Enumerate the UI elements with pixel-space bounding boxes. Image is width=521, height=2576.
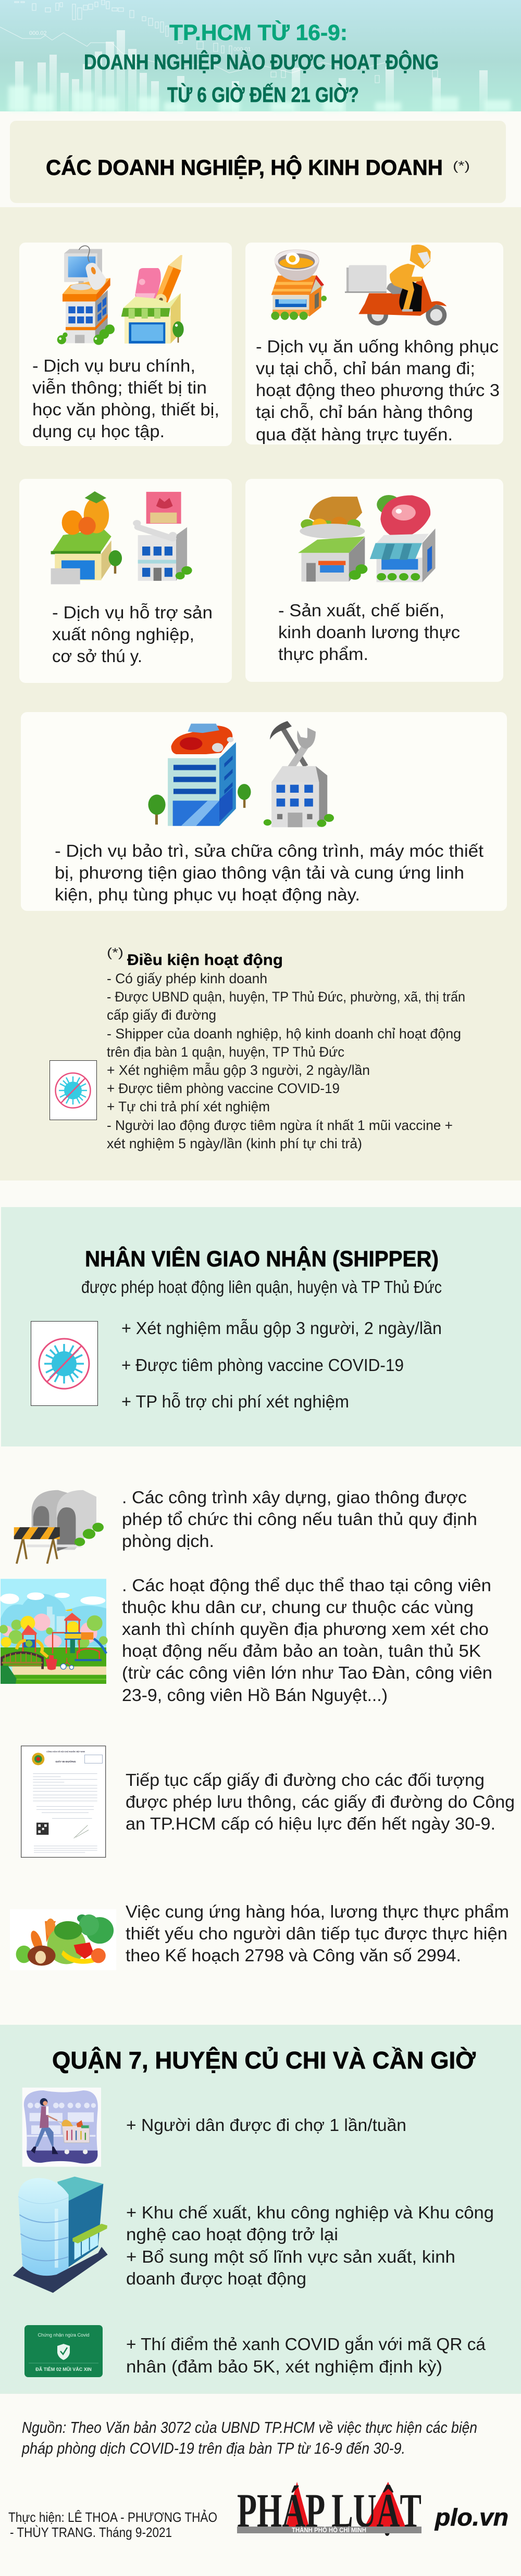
heading: district 7: QUẬN 7, HUYỆN CỦ CHI VÀ CẦN GIỜ xyxy=(52,2047,476,2074)
icon: travel permit document: GIẤY ĐI ĐƯỜNG xyxy=(55,1759,76,1763)
text: shipper conditions: + Xét nghiệm mẫu gộp 3 người, 2 ngày/lần xyxy=(121,1318,442,1338)
conditions of operation: cấp giấy đi đường xyxy=(107,1007,216,1023)
text: industrial zones: + Bổ sung một số lĩnh vực sản xuất, kinh xyxy=(126,2247,455,2266)
text: industrial zones: doanh được hoạt động xyxy=(126,2269,306,2288)
icon: no virus large xyxy=(31,1321,98,1405)
conditions of operation: - Shipper của doanh nghiệp, hộ kinh doanh chỉ hoạt động xyxy=(107,1026,461,1042)
card: food production xyxy=(245,479,503,682)
text: construction xyxy=(122,1488,477,1551)
text: maintenance and repair: kiện, phụ tùng phục vụ hoạt động này. xyxy=(55,885,360,904)
logo: plo.vn: plo.vn xyxy=(434,2504,508,2531)
text: sports in parks: 23-9, công viên Hồ Bán Nguyệt...) xyxy=(122,1685,388,1705)
text: shipper conditions: + TP hỗ trợ chi phí xét nghiệm xyxy=(121,1392,349,1411)
source note: pháp phòng dịch COVID-19 trên địa bàn TP từ 16-9 đến 30-9. xyxy=(21,2439,405,2457)
card: maintenance and repair xyxy=(21,712,507,911)
text: post and telecom services: - Dịch vụ bưu chính, xyxy=(32,356,195,375)
text: agriculture and veterinary: xuất nông nghiệp, xyxy=(52,625,194,644)
text: takeaway food service: - Dịch vụ ăn uống không phục xyxy=(256,337,499,356)
text: takeaway food service: vụ tại chỗ, chỉ bán mang đi; xyxy=(256,359,475,378)
conditions of operation: - Người lao động được tiêm ngừa ít nhất 1 mũi vaccine + xyxy=(107,1118,453,1133)
conditions of operation: trên địa bàn 1 quận, huyện, TP Thủ Đức xyxy=(107,1044,344,1060)
source note xyxy=(21,2418,477,2457)
text: sports in parks: (trừ các công viên lớn như Tao Đàn, công viên xyxy=(122,1663,492,1682)
text: post and telecom services: học văn phòng, thiết bị, xyxy=(32,400,219,419)
text: takeaway food service: hoạt động theo phương thức 3 xyxy=(256,380,500,400)
text: industrial zones xyxy=(126,2203,494,2288)
conditions of operation: + Được tiêm phòng vaccine COVID-19 xyxy=(107,1081,340,1096)
header banner: 000.02 xyxy=(29,30,47,36)
icon: woman shopping xyxy=(22,2088,101,2167)
icon: meat shop xyxy=(370,495,436,582)
text: maintenance and repair: bị, phương tiện giao thông vận tải và cung ứng linh xyxy=(55,863,464,882)
icon: computer building xyxy=(57,246,115,345)
panel: district 7, Cu Chi and Can Gio xyxy=(0,2025,521,2394)
text: industrial zones: + Khu chế xuất, khu công nghiệp và Khu công xyxy=(126,2203,494,2222)
icon: travel permit document: CÔNG HÒA XÃ HỘI CHỦ NGHĨA VIỆT NAM xyxy=(46,1750,85,1753)
text: construction: . Các công trình xây dựng, giao thông được xyxy=(122,1488,467,1507)
text: takeaway food service: tại chỗ, chỉ bán hàng thông xyxy=(256,402,473,422)
icon: construction tunnel and barrier xyxy=(14,1490,104,1564)
text: maintenance and repair xyxy=(55,841,483,904)
text: shipper conditions: + Được tiêm phòng vaccine COVID-19 xyxy=(121,1355,404,1375)
text: sports in parks: thuộc khu dân cư, chung cư thuộc các vùng xyxy=(122,1597,474,1617)
card: takeaway food service xyxy=(245,243,503,445)
text: supply of goods: theo Kế hoạch 2798 và Công văn số 2994. xyxy=(126,1946,461,1965)
text: industrial zones: nghệ cao hoạt động trở lại xyxy=(126,2225,338,2244)
text: agriculture and veterinary xyxy=(52,603,213,666)
text: food production xyxy=(278,601,460,664)
icon: stationery shop xyxy=(121,255,184,344)
title: TP.HCM TỪ 16-9: xyxy=(169,20,348,45)
text: post and telecom services: dụng cụ học tập. xyxy=(32,422,165,441)
text: travel permit: được phép lưu thông, các giấy đi đường do Công xyxy=(126,1792,515,1811)
text: shipper conditions xyxy=(121,1318,442,1411)
heading panel: businesses xyxy=(10,121,506,203)
text: travel permit xyxy=(126,1770,515,1833)
icon: industrial building xyxy=(13,2177,108,2293)
logo: Phap Luat: THÀNH PHỐ HỒ CHÍ MINH xyxy=(292,2526,366,2534)
text: travel permit: an TP.HCM cấp có hiệu lực đến hết ngày 30-9. xyxy=(126,1814,495,1833)
logo: Phap Luat xyxy=(237,2482,421,2537)
credits: - THÙY TRANG. Tháng 9-2021 xyxy=(10,2524,172,2540)
credits xyxy=(8,2509,217,2540)
icon: veterinary shop xyxy=(133,492,192,581)
conditions of operation xyxy=(107,946,465,1151)
logo: Phap Luat: PHÁP LUẬT xyxy=(237,2484,421,2537)
title: DOANH NGHIỆP NÀO ĐƯỢC HOẠT ĐỘNG xyxy=(84,50,439,74)
title: TỪ 6 GIỜ ĐẾN 21 GIỜ? xyxy=(167,83,359,107)
icon: travel permit document xyxy=(21,1746,106,1857)
text: construction: phép tổ chức thi công nếu tuân thủ quy định xyxy=(122,1509,477,1529)
text: travel permit: Tiếp tục cấp giấy đi đường cho các đối tượng xyxy=(126,1770,485,1790)
text: maintenance and repair: - Dịch vụ bảo trì, sửa chữa công trình, máy móc thiết xyxy=(55,841,483,860)
text: takeaway food service xyxy=(256,337,500,444)
text: supply of goods: thiết yếu cho người dân tiếp tục được thực hiện xyxy=(126,1924,507,1943)
title xyxy=(84,20,439,107)
conditions of operation: - Có giấy phép kinh doanh xyxy=(107,971,267,986)
text: post and telecom services xyxy=(32,356,219,441)
text: market once per week: + Người dân được đi chợ 1 lần/tuần xyxy=(126,2115,406,2135)
text: takeaway food service: qua đặt hàng trực tuyến. xyxy=(256,425,453,444)
icon: no virus small xyxy=(50,1061,97,1120)
text: agriculture and veterinary: - Dịch vụ hỗ trợ sản xyxy=(52,603,213,622)
text: agriculture and veterinary: cơ sở thú y. xyxy=(52,646,142,666)
credits: Thực hiện: LÊ THOA - PHƯƠNG THẢO xyxy=(8,2509,217,2525)
heading panel: businesses: CÁC DOANH NGHIỆP, HỘ KINH DOANH xyxy=(46,155,443,180)
text: supply of goods: Việc cung ứng hàng hóa, lương thực thực phẩm xyxy=(126,1902,509,1921)
text: sports in parks xyxy=(122,1576,492,1705)
heading: shipper: NHÂN VIÊN GIAO NHẬN (SHIPPER) xyxy=(85,1246,439,1272)
icon: food shop with bowl xyxy=(271,249,327,320)
icon: car on tower xyxy=(148,724,251,826)
text: sports in parks: . Các hoạt động thể dục thể thao tại công viên xyxy=(122,1576,491,1595)
card: agriculture support xyxy=(19,479,232,683)
header banner: 000.01 xyxy=(233,46,251,53)
icon: vegetables xyxy=(10,1909,116,1970)
conditions of operation: + Tự chi trả phí xét nghiệm xyxy=(107,1099,270,1114)
subheading: shipper: được phép hoạt động liên quận, huyện và TP Thủ Đức xyxy=(81,1277,442,1297)
text: green COVID card pilot xyxy=(126,2334,486,2376)
conditions of operation: (*) xyxy=(107,946,123,960)
heading panel: businesses: (*) xyxy=(453,159,470,173)
conditions of operation: Điều kiện hoạt động xyxy=(127,951,283,969)
icon: fruit shop xyxy=(51,491,122,584)
conditions of operation: + Xét nghiệm mẫu gộp 3 người, 2 ngày/lần xyxy=(107,1062,370,1078)
text: sports in parks: hoạt động nếu đảm bảo an toàn, tuân thủ 5K xyxy=(122,1641,481,1660)
icon: green COVID card: Chứng nhận ngừa Covid xyxy=(38,2332,90,2338)
icon: food market xyxy=(298,497,367,581)
text: post and telecom services: viễn thông; thiết bị tin xyxy=(32,378,207,397)
text: sports in parks: xanh thì chính quyền địa phương xem xét cho xyxy=(122,1619,489,1639)
panel: shipper xyxy=(1,1207,521,1446)
icon: delivery scooter xyxy=(345,245,446,325)
text: food production: - Sản xuất, chế biến, xyxy=(278,601,444,620)
icon: green COVID card xyxy=(24,2325,103,2377)
card: post, telecom, office equipment xyxy=(19,243,232,446)
conditions of operation: - Được UBND quận, huyện, TP Thủ Đức, phường, xã, thị trấn xyxy=(107,989,465,1005)
text: supply of goods xyxy=(126,1902,509,1965)
icon: tools on building xyxy=(264,721,334,827)
text: food production: kinh doanh lương thực xyxy=(278,623,460,642)
panel: business categories and conditions xyxy=(0,207,521,1181)
text: green COVID card pilot: + Thí điểm thẻ xanh COVID gắn với mã QR cá xyxy=(126,2334,486,2354)
text: construction: phòng dịch. xyxy=(122,1531,214,1551)
header banner xyxy=(0,0,521,111)
icon: park playground xyxy=(0,1579,108,1684)
text: green COVID card pilot: nhân (đảm bảo 5K, xét nghiệm định kỳ) xyxy=(126,2357,442,2376)
icon: green COVID card: ĐÃ TIÊM 02 MŨI VẮC XIN xyxy=(35,2366,92,2372)
conditions of operation: xét nghiệm 5 ngày/lần (kinh phí tự chi trả) xyxy=(107,1136,362,1151)
text: food production: thực phẩm. xyxy=(278,644,368,664)
